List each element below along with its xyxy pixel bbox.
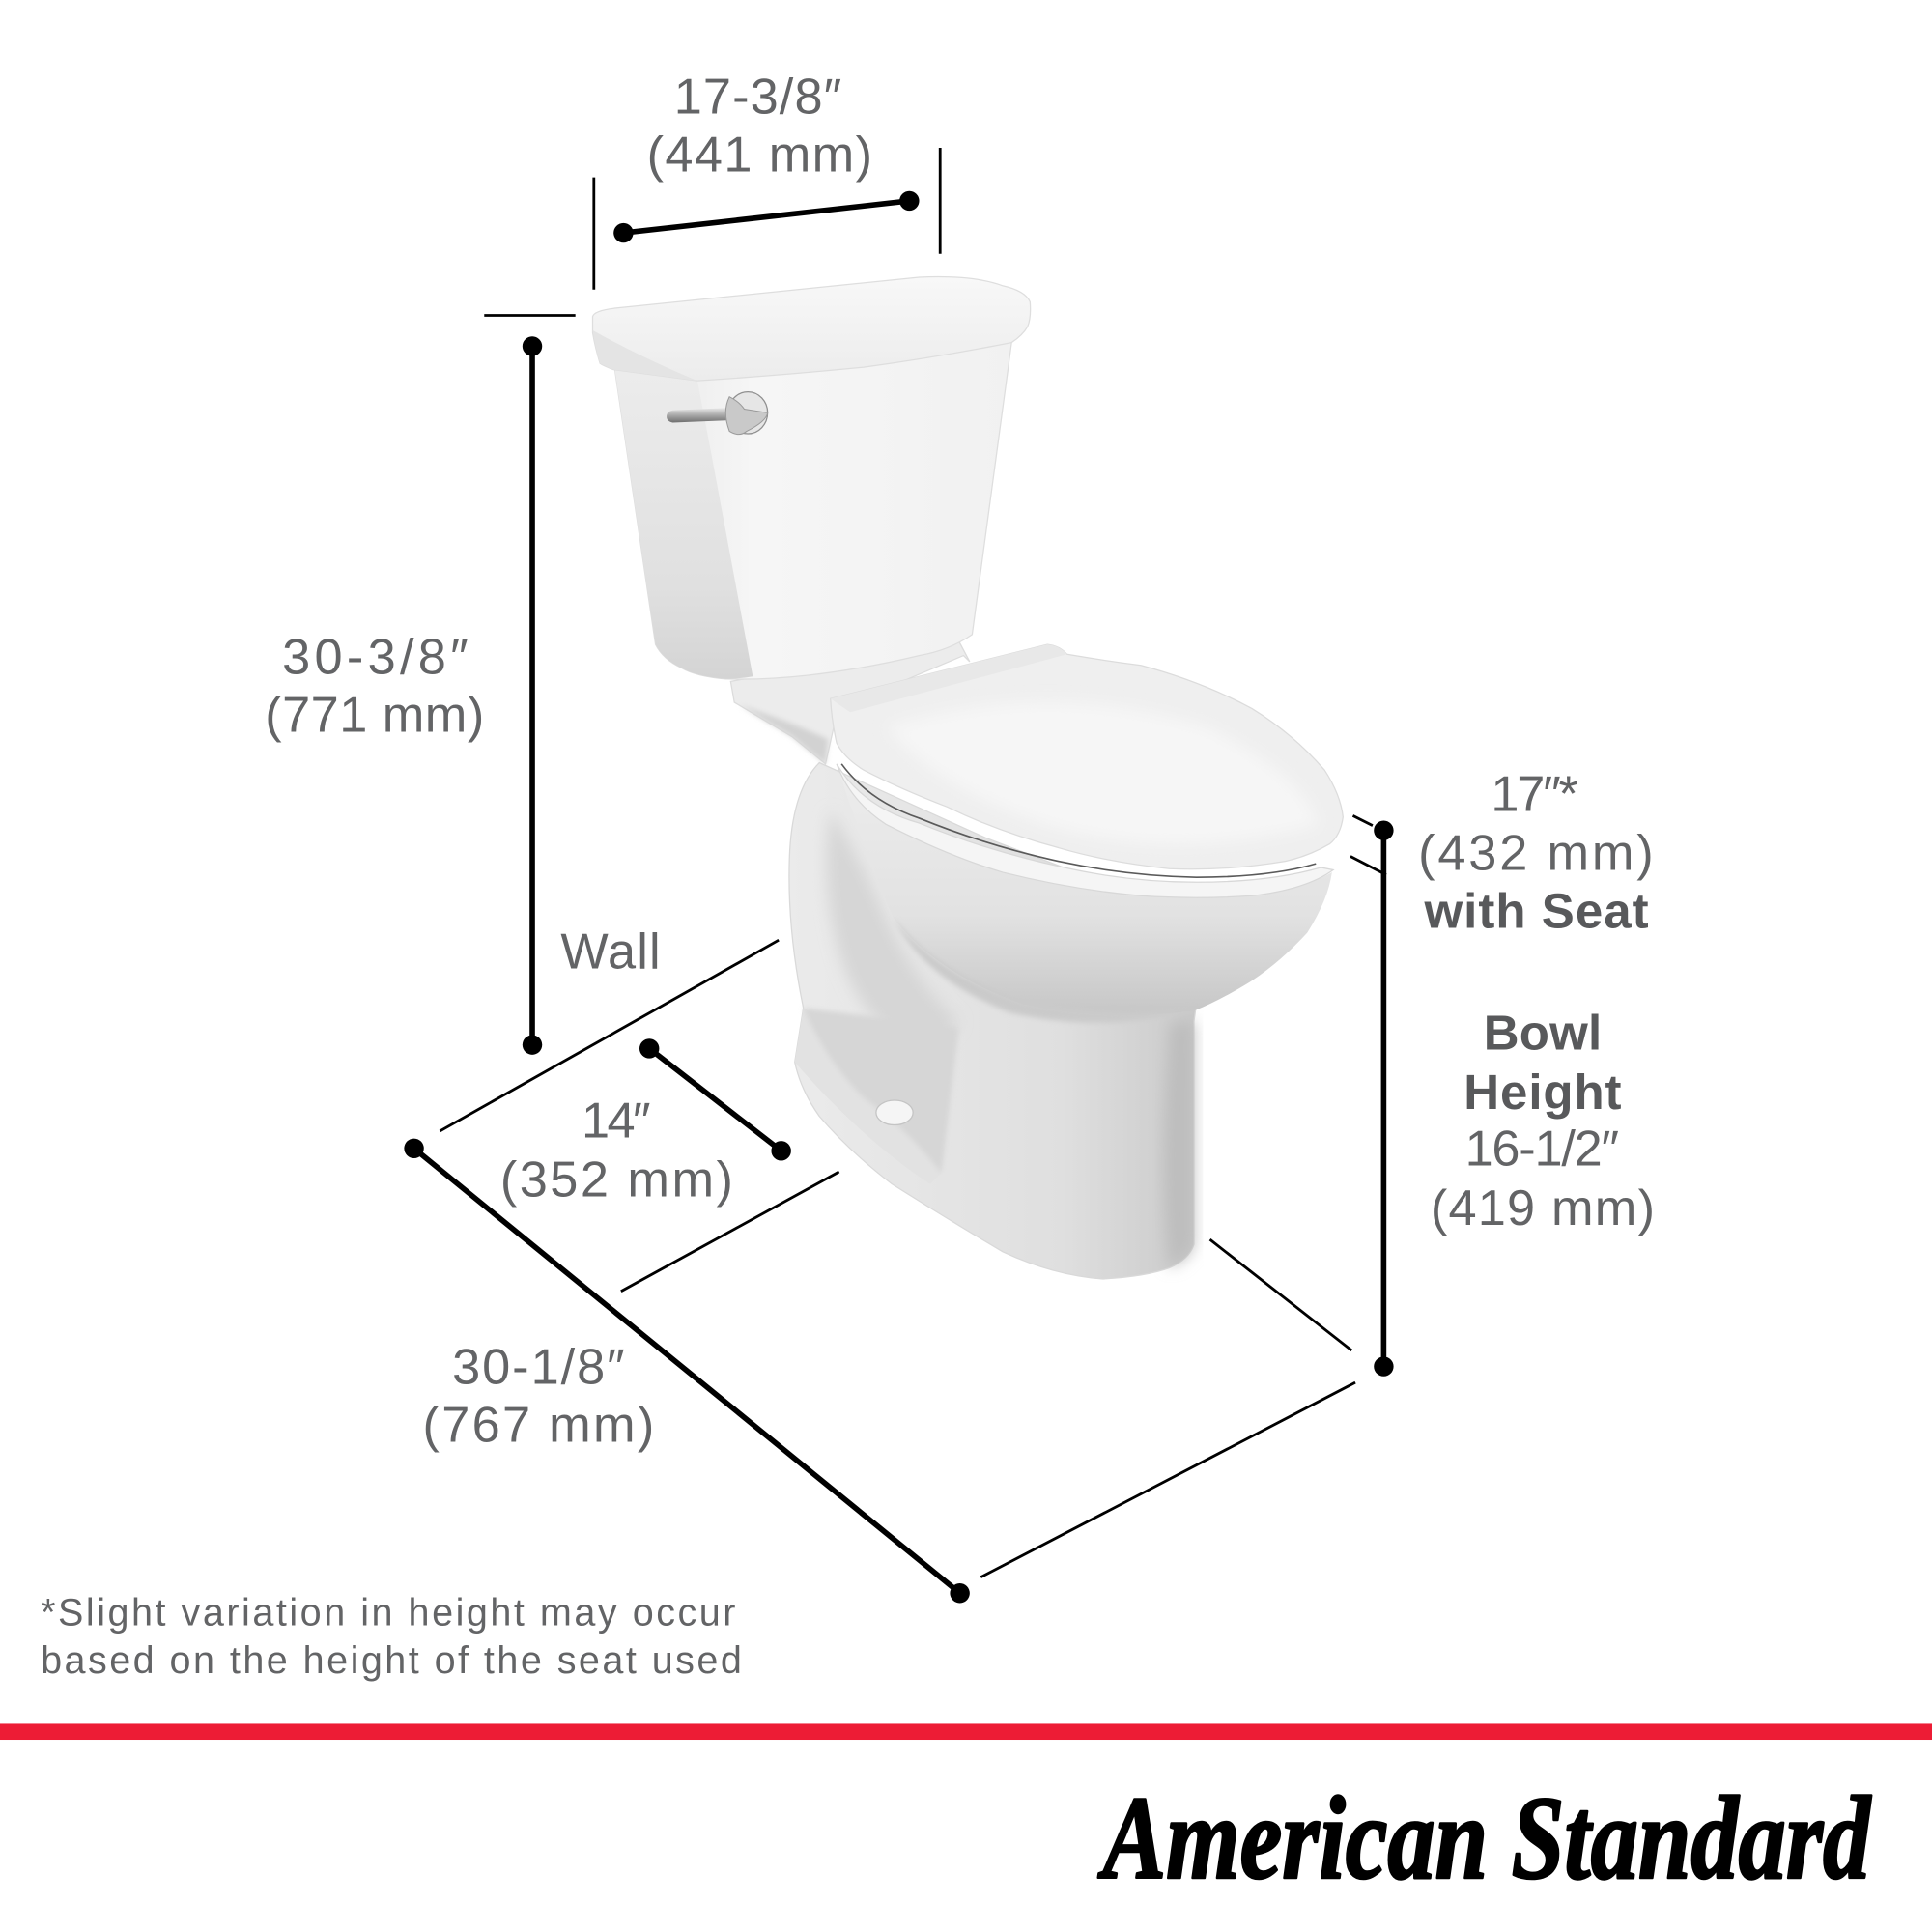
measure line xyxy=(613,191,920,242)
seat lid highlight xyxy=(887,702,1319,844)
small ticks xyxy=(1350,815,1386,875)
bolt cap xyxy=(876,1100,913,1125)
bowl height label: 16-1/2″ xyxy=(1465,1122,1619,1178)
width label: 17-3/8″ xyxy=(674,69,841,125)
measure line xyxy=(1374,820,1394,1377)
red divider band xyxy=(0,1723,1932,1740)
footnote: *Slight variation in height may occur xyxy=(41,1591,735,1634)
base recess xyxy=(795,1008,958,1184)
footnote xyxy=(41,1591,742,1682)
tank side facet xyxy=(614,370,753,679)
with seat label: (432 mm) xyxy=(1418,826,1654,882)
bowl xyxy=(837,764,1332,1015)
seat lid xyxy=(831,644,1343,869)
tank body xyxy=(614,343,1011,679)
lid edge shade xyxy=(593,330,697,381)
depth label: 30-1/8″ xyxy=(452,1339,625,1395)
bowl height label xyxy=(1431,1006,1655,1236)
top tick xyxy=(484,314,576,317)
bowl height label: Bowl xyxy=(1484,1006,1602,1061)
dimension: total height 30-3/8 xyxy=(265,316,576,1055)
rough-in label: 14″ xyxy=(582,1093,650,1149)
measure line xyxy=(404,1139,970,1603)
depth label: (767 mm) xyxy=(423,1397,654,1453)
bowl rim underside shadow xyxy=(894,918,1195,1023)
with seat label: with Seat xyxy=(1423,883,1649,938)
measure line xyxy=(639,1038,791,1161)
seat lid hinge edge xyxy=(831,644,1067,712)
rear arch shading xyxy=(827,810,958,1060)
bowl height label: (419 mm) xyxy=(1431,1180,1655,1236)
tank lid xyxy=(593,277,1031,381)
trunk right shadow xyxy=(1164,1021,1194,1267)
depth label xyxy=(423,1339,654,1453)
height label: 30-3/8″ xyxy=(282,630,469,686)
tank to bowl neck xyxy=(730,640,970,764)
extension lines xyxy=(980,1239,1355,1577)
flush handle xyxy=(667,392,768,435)
width label xyxy=(647,69,872,183)
with seat label: 17″* xyxy=(1491,766,1578,822)
toilet product image xyxy=(593,277,1343,1279)
seat ring under lid xyxy=(837,764,1333,897)
handle lever xyxy=(667,408,732,423)
extension ticks xyxy=(594,148,940,290)
measure line xyxy=(523,336,542,1055)
dimension: bowl height xyxy=(1350,766,1655,1377)
rough-in label xyxy=(500,1093,733,1208)
dimension: depth 30-1/8 xyxy=(404,1139,1355,1603)
height label: (771 mm) xyxy=(265,688,484,744)
rough-in label: (352 mm) xyxy=(500,1152,733,1208)
footnote: based on the height of the seat used xyxy=(41,1639,742,1682)
handle paddle xyxy=(725,397,768,435)
with seat label xyxy=(1418,766,1654,938)
dimension: rough-in 14 xyxy=(440,940,839,1292)
wall label: Wall xyxy=(560,924,661,980)
width label: (441 mm) xyxy=(647,127,872,183)
extension lines xyxy=(440,940,839,1292)
bowl height label: Height xyxy=(1463,1065,1622,1120)
handle plate xyxy=(728,392,768,434)
toilet lower body and trunk xyxy=(789,763,1244,1279)
dimension: tank width 17-3/8 xyxy=(594,69,940,290)
seat dark gap line xyxy=(841,764,1316,877)
height label xyxy=(265,630,484,744)
